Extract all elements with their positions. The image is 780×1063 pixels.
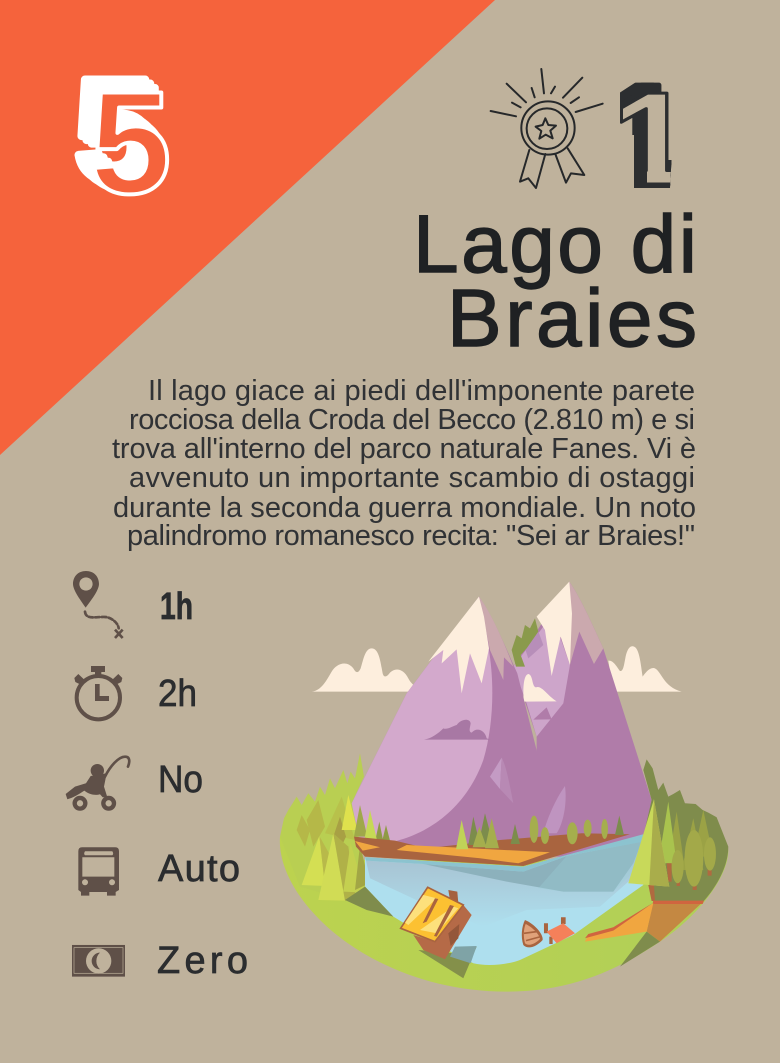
info list — [66, 571, 248, 982]
clouds — [312, 646, 682, 692]
rank number 1: 1 — [611, 65, 695, 212]
title — [413, 199, 697, 364]
icon: banknote — [72, 945, 125, 977]
label: 1h: 1h — [160, 586, 193, 628]
description: durante la seconda guerra mondiale. Un noto — [113, 492, 696, 524]
description: palindromo romanesco recita: "Sei ar Braies!" — [127, 520, 695, 552]
description: Il lago giace ai piedi dell'imponente parete — [148, 375, 695, 407]
shore — [354, 833, 643, 872]
boat — [522, 920, 543, 947]
lake — [365, 835, 643, 965]
icon: stroller — [66, 757, 129, 809]
description — [112, 375, 696, 552]
icon: stopwatch — [74, 666, 122, 719]
front mountain — [352, 597, 566, 857]
title: Braies — [447, 273, 697, 364]
rank number 1: 1 — [610, 57, 683, 204]
illustration: mountain lake — [280, 582, 728, 992]
shadows — [345, 887, 477, 978]
rank number 5: 5 — [90, 61, 171, 224]
rank number 1 — [620, 82, 672, 188]
label: No: No — [158, 759, 203, 801]
rank number 5: 5 — [84, 56, 165, 219]
description: trova all'interno del parco naturale Fanes. Vi è — [112, 433, 696, 465]
rank number 5: 5 — [74, 48, 155, 211]
rank number 1: 1 — [604, 57, 677, 204]
right forest — [643, 759, 728, 902]
title: Lago di — [413, 199, 697, 290]
label: 2h: 2h — [158, 673, 197, 715]
label: Auto: Auto — [158, 848, 240, 890]
label: Zero: Zero — [157, 940, 248, 982]
icon: bus — [78, 847, 119, 896]
back mountain — [512, 582, 652, 857]
rank number 5: 5 — [79, 52, 160, 215]
description: rocciosa della Croda del Becco (2.810 m) e si — [129, 404, 695, 436]
icon: route pin — [73, 571, 123, 638]
dock — [544, 917, 575, 944]
ground — [280, 837, 728, 992]
orange corner — [0, 0, 495, 455]
shore trees — [456, 813, 624, 849]
medal icon — [491, 69, 603, 188]
cabin — [401, 887, 472, 959]
description: avvenuto un importante scambio di ostaggi — [129, 462, 695, 494]
bank and path — [585, 901, 704, 967]
left forest — [280, 753, 391, 901]
rank number 1: 1 — [604, 67, 677, 214]
big tree — [628, 799, 669, 901]
